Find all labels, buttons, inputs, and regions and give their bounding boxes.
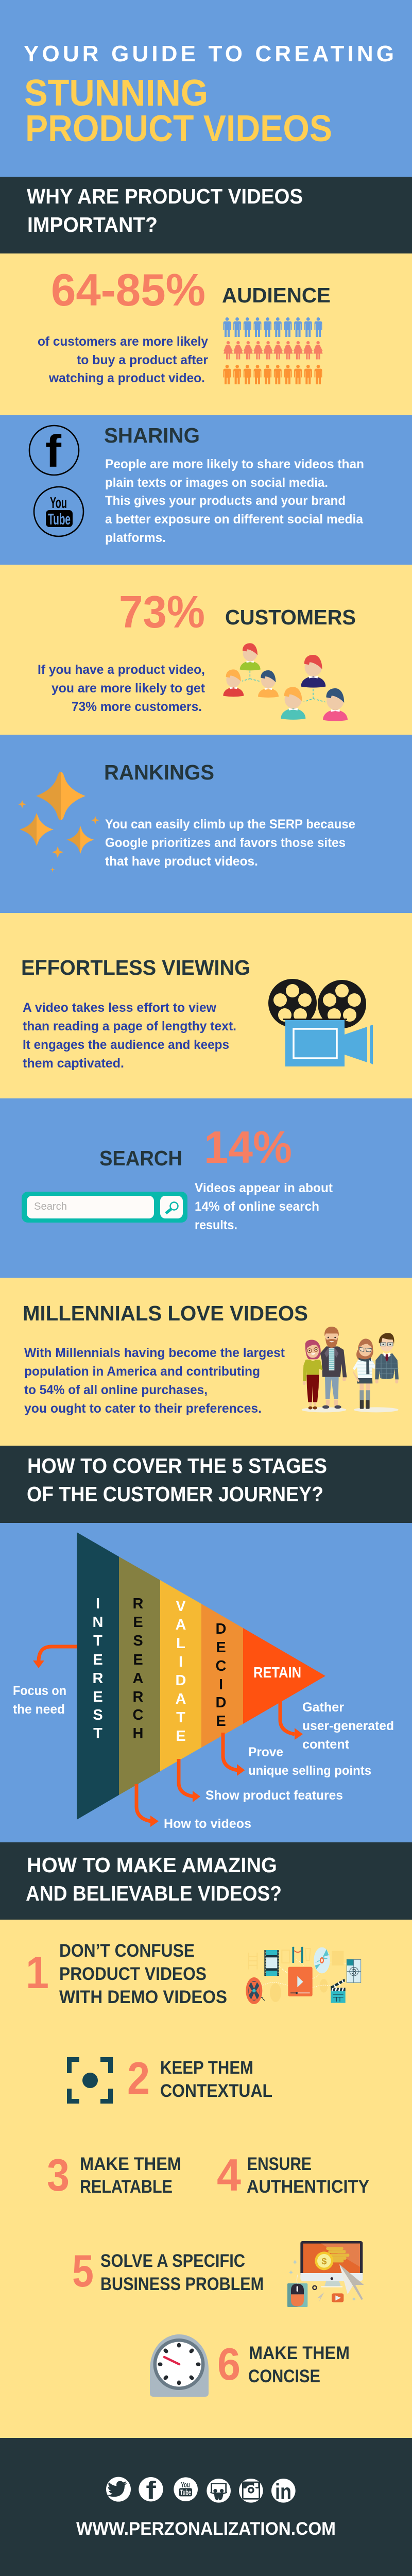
chart: funnel stages [77,1532,325,1820]
label: research [133,1596,144,1742]
heading: customers: CUSTOMERS [225,605,356,629]
heading: how to cover the 5 stages [27,1454,327,1506]
step 6 [217,2338,350,2389]
arrow: retain [280,1701,303,1740]
step 6: 6 [217,2338,241,2389]
panel: footer [0,2438,412,2576]
label: research: E [133,1652,143,1668]
panel: rankings [0,735,412,913]
label: interest: S [93,1707,103,1723]
text: step 4: ENSURE [247,2154,312,2174]
icon: facebook: f [146,2477,157,2504]
woman with glasses [353,1338,375,1409]
text: show product features: Show product features [205,1788,343,1803]
heading: how to make amazing and believable videos: HOW TO MAKE AMAZING [27,1853,277,1877]
icon: monitor with coins [287,2241,364,2307]
step 2 [127,2053,272,2104]
icon: clock [150,2334,209,2397]
heading: why are product videos important: IMPORTANT? [27,213,158,236]
icon: video production collage: 3 [352,1968,356,1976]
panel: sharing [0,415,412,565]
stat: 14%: 14% [204,1122,292,1173]
icon: monitor with coins: $ [321,2256,327,2266]
title: main heading [24,73,332,149]
arrow: interest [33,1647,77,1668]
panel: tips [0,1920,412,2438]
panel: search [0,1098,412,1278]
icon: customer groups [223,643,348,721]
man with beard [320,1327,347,1409]
text: sharing description: a better exposure on different social media [105,512,364,527]
text: rankings description: that have product videos. [105,854,258,869]
heading: rankings: RANKINGS [104,760,214,784]
heading: effortless viewing: EFFORTLESS VIEWING [21,956,250,979]
heading: how to cover the 5 stages: HOW TO COVER THE 5 STAGES [27,1454,327,1478]
text: rankings description [105,817,355,869]
label: validate: L [176,1635,185,1652]
icon: stars [18,772,99,872]
text: sharing description: People are more likely to share videos than [105,457,364,471]
text: step 5: BUSINESS PROBLEM [100,2274,264,2294]
panel: audience [0,253,412,415]
text: millennials description: With Millennials having become the largest [24,1346,285,1360]
step 4 [217,2149,369,2200]
label: validate: A [176,1691,186,1707]
label: validate: I [179,1654,183,1670]
text: effortless description [23,1001,236,1071]
step 5: 5 [72,2245,94,2296]
label: research: H [133,1725,143,1742]
icon: twitter [106,2477,131,2502]
panel: hero header [0,0,412,177]
stat: 73%: 73% [119,586,205,637]
label: validate: E [176,1728,186,1744]
text: step 3 [80,2154,181,2197]
label: research: S [133,1633,143,1649]
text: gather user-generated content: content [302,1737,350,1752]
text: customers description: you are more likely to get [52,681,205,696]
icon: movie camera [268,979,373,1066]
label: interest: N [93,1614,103,1631]
text: effortless description: A video takes less effort to view [23,1001,217,1015]
label: decide: I [219,1676,223,1693]
arrow: decide [223,1733,245,1776]
text: gather user-generated content: user-generated [302,1719,394,1733]
text: millennials description: to 54% of all online purchases, [24,1383,208,1397]
text: step 2 [160,2058,272,2101]
label: research: E [133,1614,143,1631]
text: sharing description [105,457,364,545]
text: effortless description: them captivated. [23,1056,124,1071]
heading: how to cover the 5 stages: OF THE CUSTOMER JOURNEY? [27,1482,323,1506]
text: prove unique selling points: unique selling points [248,1764,371,1778]
text: gather user-generated content: Gather [302,1700,344,1715]
text: website url: WWW.PERZONALIZATION.COM [76,2519,336,2539]
panel: customer journey banner [0,1446,412,1523]
text: step 1: PRODUCT VIDEOS [59,1964,207,1984]
label: decide: E [216,1713,226,1730]
stat: 64-85%: 64-85% [51,264,205,315]
step 1: 1 [26,1947,49,1998]
step 5 [72,2245,264,2296]
label: validate: D [176,1672,186,1689]
text: step 2: CONTEXTUAL [160,2081,272,2101]
text: millennials description [24,1346,285,1416]
text: audience description [38,334,208,385]
text: step 4: AUTHENTICITY [247,2177,369,2197]
heading: why are product videos important [27,184,303,236]
text: prove unique selling points [248,1745,371,1778]
arrow: research [136,1784,159,1827]
text: effortless description: than reading a page of lengthy text. [23,1019,236,1033]
text: sharing description: This gives your products and your brand [105,494,346,508]
text: step 1 [59,1941,227,2007]
icon: youtube: Tube [48,510,71,528]
heading: how to make amazing and believable videos: AND BELIEVABLE VIDEOS? [26,1882,282,1905]
label: validate: A [176,1617,186,1633]
label: validate: V [176,1598,186,1615]
text: step 6 [248,2343,350,2386]
label: validate [176,1598,186,1744]
icon: social media row [106,2477,296,2504]
icon: millennial characters [302,1327,399,1412]
icon: audience pictogram grid [224,317,323,384]
text: rankings description: Google prioritizes and favors those sites [105,836,346,850]
label: interest: E [93,1689,103,1705]
label: research: R [133,1689,144,1705]
panel: why product videos banner [0,177,412,253]
text: focus on the need [13,1684,66,1717]
text: step 1: WITH DEMO VIDEOS [59,1987,227,2007]
step 3 [47,2149,181,2200]
text: focus on the need: Focus on [13,1684,66,1698]
heading: how to make amazing and believable videos [26,1853,282,1905]
icon: instagram [239,2479,263,2503]
text: search description: 14% of online search [195,1199,319,1214]
arrow: validate [179,1759,200,1802]
text: step 4 [247,2154,369,2197]
label: decide: D [216,1621,226,1637]
text: customers description: If you have a product video, [38,663,205,677]
icon: linkedin: in [275,2480,291,2503]
text: effortless description: It engages the audience and keeps [23,1038,229,1052]
label: decide: E [216,1639,226,1656]
title: main heading: STUNNING [24,73,208,114]
text: gather user-generated content [302,1700,394,1752]
text: step 5: SOLVE A SPECIFIC [100,2251,245,2271]
icon: youtube: Tube [180,2489,191,2497]
text: sharing description: platforms. [105,531,166,545]
label: decide: D [216,1694,226,1711]
text: millennials description: you ought to cater to their preferences. [24,1401,262,1416]
label: decide: C [216,1658,227,1674]
text: focus on the need: the need [13,1702,65,1717]
text: how to videos: How to videos [164,1817,251,1831]
icon: slideshare [207,2479,231,2503]
heading: search: SEARCH [99,1146,182,1170]
icon: facebook: f [45,426,62,477]
text: prove unique selling points: Prove [248,1745,283,1759]
panel: customer journey funnel [0,1523,412,1842]
icon: youtube: You [50,494,67,512]
text: rankings description: You can easily climb up the SERP because [105,817,355,832]
text: step 6: MAKE THEM [249,2343,350,2363]
title: main heading: PRODUCT VIDEOS [25,108,332,149]
label: interest [93,1596,104,1742]
label: interest: R [93,1670,104,1687]
text: customers description: 73% more customers. [72,700,202,714]
label: interest: I [96,1596,100,1612]
label: validate: T [176,1709,185,1726]
label: interest: E [93,1652,103,1668]
text: millennials description: population in America and contributing [24,1364,260,1379]
woman with pink hair [303,1340,323,1410]
icon: facebook [139,2477,163,2504]
label: research: A [133,1670,144,1687]
panel: millennials [0,1278,412,1446]
text: search description: Videos appear in about [195,1181,333,1195]
text: step 6: CONCISE [248,2366,320,2386]
man with glasses [375,1333,399,1383]
label: decide [216,1621,227,1730]
panel: effortless viewing [0,913,412,1098]
icon: search box [22,1192,187,1223]
label: interest: T [93,1633,102,1649]
label: retain: RETAIN [253,1665,301,1681]
step 2: 2 [127,2053,150,2104]
text: step 3: MAKE THEM [80,2154,181,2174]
text: step 3: RELATABLE [80,2177,173,2197]
label: interest: T [93,1725,102,1742]
heading: audience: AUDIENCE [222,283,331,307]
label: research: R [133,1596,144,1612]
panel: amazing videos banner [0,1842,412,1920]
label: research: C [133,1707,144,1723]
step 1 [26,1941,227,2007]
step 3: 3 [47,2149,70,2200]
text: audience description: watching a product video. [48,371,205,385]
text: sharing description: plain texts or images on social media. [105,476,328,490]
icon: focus brackets [69,2060,110,2101]
icon: youtube [174,2477,198,2501]
icon: youtube: You [181,2481,190,2489]
icon: search box: Search [34,1201,67,1212]
icon: youtube [34,487,83,536]
icon: facebook [29,426,79,477]
heading: why are product videos important: WHY ARE PRODUCT VIDEOS [27,184,303,208]
title: kicker: YOUR GUIDE TO CREATING [24,41,394,66]
text: audience description: to buy a product after [77,353,208,367]
text: search description [195,1181,333,1232]
heading: millennials love videos: MILLENNIALS LOVE VIDEOS [23,1301,308,1325]
text: customers description [38,663,205,714]
text: step 5 [100,2251,264,2294]
step 4: 4 [217,2149,241,2200]
text: step 2: KEEP THEM [160,2058,253,2078]
text: audience description: of customers are more likely [38,334,208,349]
text: search description: results. [195,1218,237,1232]
panel: customers [0,565,412,735]
heading: sharing: SHARING [104,423,200,447]
text: step 1: DON’T CONFUSE [59,1941,195,1961]
icon: video production collage [246,1947,361,2004]
